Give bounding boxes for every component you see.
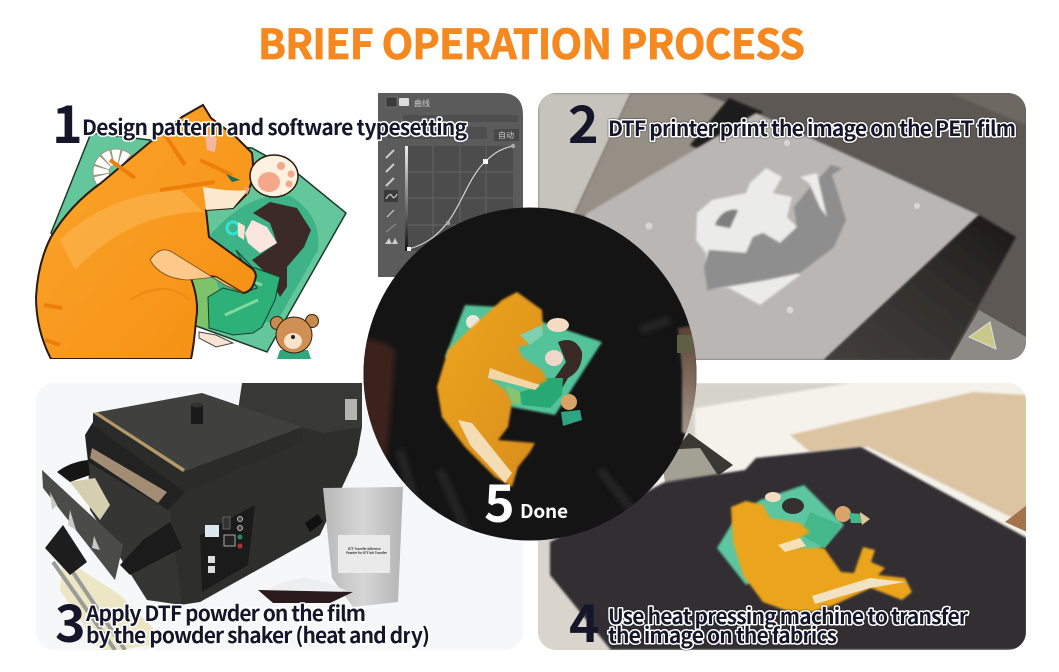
lid front (93, 413, 302, 492)
panel: step 1 design pattern (36, 83, 523, 362)
lower right panel (950, 310, 1026, 360)
step 1 number: 1 (52, 83, 83, 158)
printed image gray layer (704, 165, 846, 290)
curved black guard (57, 460, 90, 482)
black slot (690, 98, 763, 150)
powder bag: DTF Transfer Adhesive (348, 547, 381, 551)
teddy print (561, 394, 582, 426)
girl pajamas (208, 250, 280, 335)
hair print (552, 340, 582, 392)
heat press photo (538, 383, 1027, 650)
step 4 caption: the image on the fabrics (608, 620, 837, 650)
right arm (678, 325, 697, 440)
step 1 caption: Design pattern and software typesetting (82, 112, 467, 142)
feed tray (42, 470, 123, 580)
switches (205, 516, 242, 573)
girl face (245, 220, 277, 253)
step 5 caption: Done (520, 497, 568, 524)
daisy print (466, 315, 480, 329)
printed white leg (800, 173, 827, 217)
light left wall (538, 93, 632, 214)
control panel (200, 505, 255, 592)
teddy on shirt (835, 506, 870, 525)
tray labels (50, 492, 100, 550)
cream film (60, 566, 163, 650)
diagonal strip (575, 93, 726, 216)
registration dots (646, 140, 920, 314)
title: BRIEF OPERATION PROCESS (258, 11, 805, 71)
teddy bear (270, 314, 318, 362)
girl hair (252, 202, 311, 297)
panel: step 4 heat press (538, 383, 1027, 657)
step 4 caption: Use heat pressing machine to transfer (608, 601, 969, 631)
daisy (101, 157, 131, 187)
pajamas print (520, 378, 563, 408)
roller belt (90, 448, 167, 503)
printed image white underbase (696, 168, 800, 305)
curve graph (405, 144, 515, 251)
printer photo (538, 93, 1026, 360)
cat tail stripe (458, 420, 512, 483)
cat muzzle print (520, 325, 543, 345)
pillow print (445, 305, 602, 415)
girl hair on shirt (782, 498, 804, 514)
girl pajamas on shirt (800, 512, 841, 548)
cat on shirt (731, 501, 912, 612)
shirt folds (400, 320, 670, 540)
glow hand (227, 222, 245, 240)
step 3 caption (85, 598, 430, 650)
lime legs print (505, 385, 520, 405)
step 3 number: 3 (55, 582, 86, 657)
left side (88, 460, 182, 605)
brown corner (1005, 505, 1027, 532)
panel: step 3 powder shaker (36, 383, 523, 657)
side bracket (45, 525, 87, 575)
cardboard (790, 392, 1027, 525)
dark underside (85, 422, 185, 510)
cat paw (250, 155, 298, 197)
panel: step 5 finished t-shirt circle (362, 208, 697, 540)
cat markings (44, 133, 250, 345)
press dark edge (675, 433, 733, 475)
feet (199, 332, 233, 347)
left arm (362, 340, 395, 470)
step 4 number: 4 (569, 582, 600, 657)
printed hair detail (715, 210, 738, 228)
pillow (51, 133, 346, 352)
face print (545, 350, 563, 366)
preset fields (388, 115, 519, 141)
step 3 caption: Apply DTF powder on the film (85, 598, 366, 628)
under-body lime green (192, 278, 219, 330)
inner cream feed (70, 478, 110, 520)
handle (305, 514, 323, 532)
worn t-shirt (362, 292, 697, 540)
highlight band (950, 93, 1026, 125)
cream arm on shirt (778, 538, 806, 552)
panel: step 2 printer (538, 83, 1026, 360)
rollers (53, 556, 125, 650)
cat print (437, 292, 547, 487)
rear unit (238, 383, 362, 433)
warning triangle (969, 322, 996, 349)
lid tan edge (93, 412, 185, 472)
step 5 number: 5 (484, 462, 515, 537)
chimney (191, 402, 203, 424)
film sheet (584, 113, 979, 360)
preset fields: 自动 (498, 130, 514, 141)
powder bag (323, 487, 403, 607)
left table (538, 520, 618, 650)
panel tabs (386, 97, 430, 109)
tattoo (677, 335, 693, 353)
cat paw print (547, 318, 569, 332)
powder bowl (258, 578, 353, 603)
powder bag: Powder for DTF Ink Transfer (346, 551, 388, 555)
step 3 caption: by the powder shaker (heat and dry) (86, 620, 430, 650)
main body (168, 410, 362, 605)
press plate (660, 448, 719, 482)
rear label (345, 399, 357, 420)
black shirt (550, 447, 1027, 650)
cream arm print (488, 368, 540, 390)
photoshop curves panel (378, 93, 523, 277)
tail stripe (812, 578, 905, 604)
powder shaker machine (42, 383, 362, 650)
pillow on shirt (717, 485, 844, 585)
step 2 number: 2 (568, 83, 599, 158)
lid (93, 393, 302, 472)
side arm (120, 522, 182, 575)
cat paw on shirt (765, 492, 781, 502)
curve tools (384, 150, 398, 244)
illustration: cat and sleeping girl (36, 105, 346, 362)
step 2 caption: DTF printer print the image on the PET film (608, 113, 1016, 143)
dark bed (824, 215, 1016, 360)
panel tabs: 曲线 (414, 98, 430, 109)
step 4 caption (608, 601, 969, 650)
cat body (36, 105, 256, 359)
